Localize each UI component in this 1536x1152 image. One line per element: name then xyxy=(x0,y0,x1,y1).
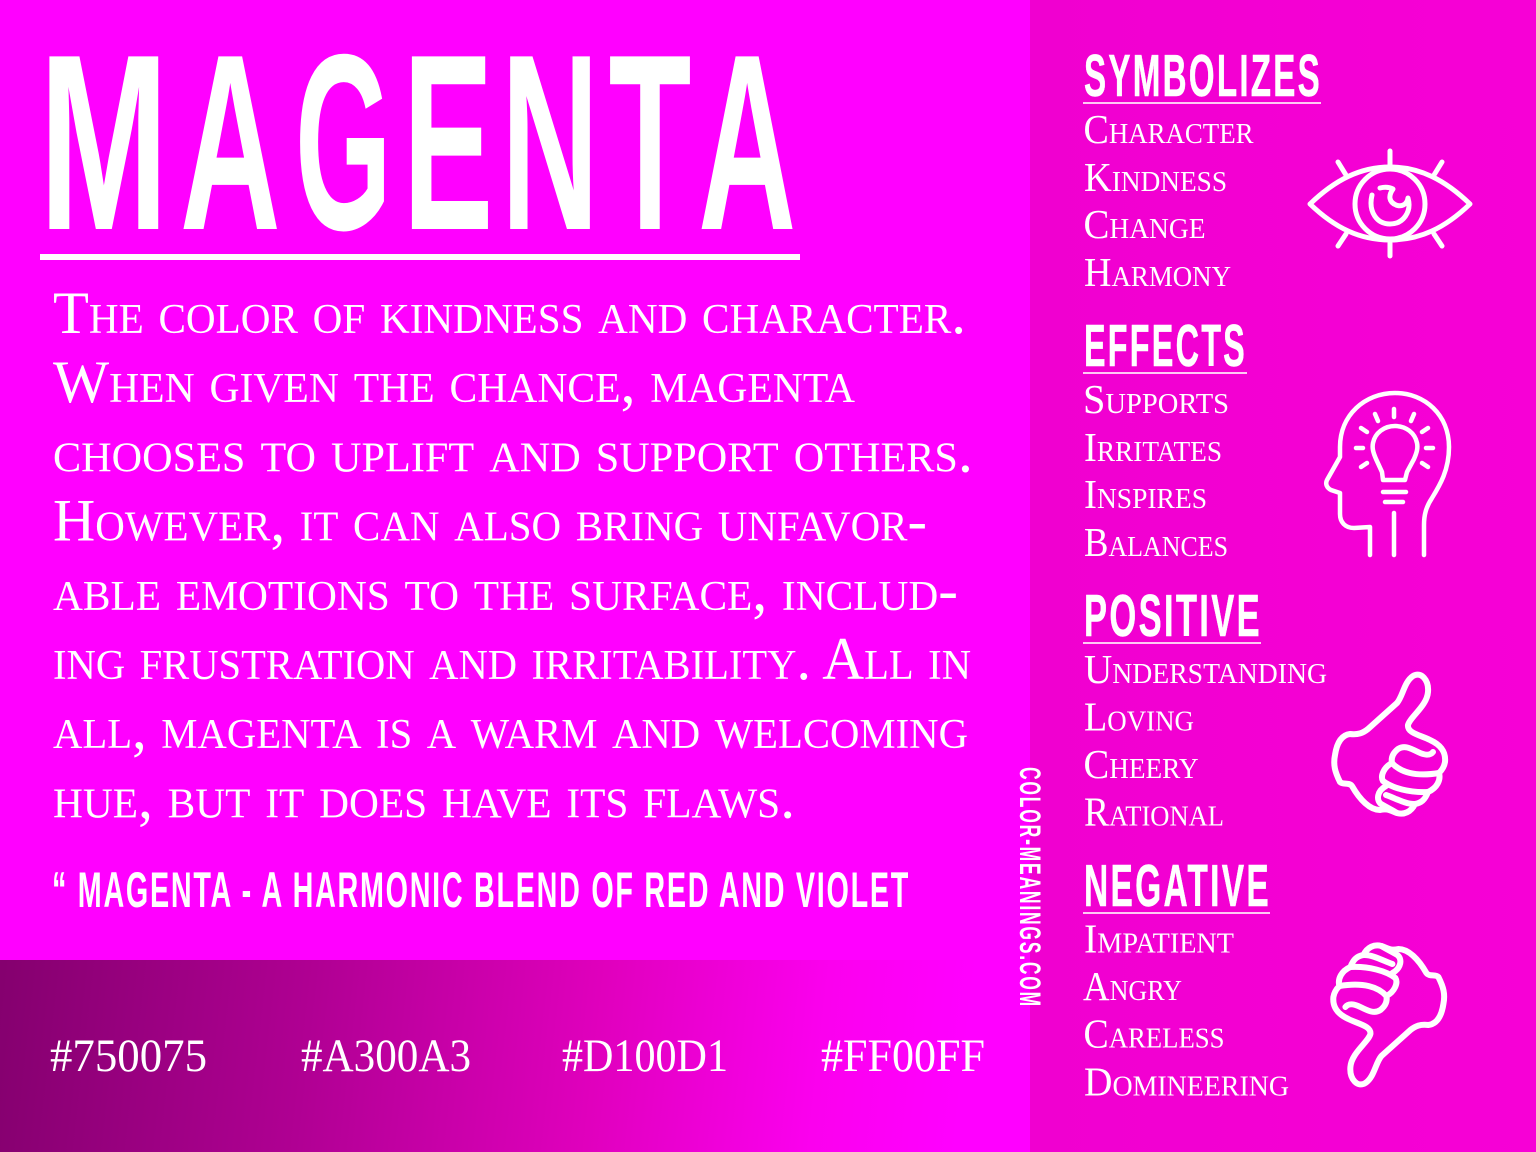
title: A xyxy=(180,3,281,283)
icon: head with light bulb xyxy=(1326,393,1449,555)
background: main magenta field xyxy=(0,0,1030,1152)
section: symbolizes xyxy=(1083,43,1322,295)
list: negative: Angry xyxy=(1083,963,1182,1009)
description text block xyxy=(53,280,973,830)
title: G xyxy=(295,2,392,282)
icon: eye xyxy=(1310,151,1470,256)
heading: effects: EFFECTS xyxy=(1084,313,1247,379)
list: negative: Domineering xyxy=(1084,1058,1289,1104)
title underline xyxy=(40,254,800,260)
list: positive: Loving xyxy=(1084,694,1194,740)
heading: positive: POSITIVE xyxy=(1084,583,1262,649)
section: negative xyxy=(1083,853,1289,1104)
title xyxy=(39,1,796,283)
section: positive xyxy=(1083,583,1327,834)
title: M xyxy=(39,3,169,283)
list: effects: Balances xyxy=(1084,519,1228,565)
list: positive: Understanding xyxy=(1084,646,1327,692)
icon: thumbs up xyxy=(1334,675,1445,814)
description text block: able emotions to the surface, includ- xyxy=(53,557,958,623)
list: effects xyxy=(1083,376,1229,565)
list: symbolizes: Harmony xyxy=(1084,249,1231,295)
hex code 1: #750075 xyxy=(50,1030,207,1082)
list: symbolizes: Change xyxy=(1084,201,1206,247)
list: positive: Rational xyxy=(1084,788,1224,834)
list: effects: Irritates xyxy=(1084,424,1222,470)
title: ENTA xyxy=(403,1,796,283)
list: effects: Inspires xyxy=(1084,471,1207,517)
hex code 3: #D100D1 xyxy=(562,1030,728,1082)
list: positive: Cheery xyxy=(1084,741,1199,787)
list: negative xyxy=(1083,916,1289,1104)
description text block: ing frustration and irritability. All in xyxy=(53,626,971,692)
description text block: chooses to uplift and support others. xyxy=(53,418,973,484)
list: symbolizes: Character xyxy=(1084,106,1254,152)
panel: gradient colour strip xyxy=(0,960,1030,1152)
list: symbolizes xyxy=(1084,106,1254,295)
list: negative: Impatient xyxy=(1084,916,1234,962)
section: effects xyxy=(1083,313,1247,565)
icon: thumbs down xyxy=(1333,945,1444,1084)
description text block: hue, but it does have its flaws. xyxy=(53,764,795,830)
description text block: However, it can also bring unfavor- xyxy=(53,488,927,554)
description text block: When given the chance, magenta xyxy=(53,349,856,415)
list: positive xyxy=(1084,646,1327,834)
heading: negative: NEGATIVE xyxy=(1084,853,1271,919)
list: symbolizes: Kindness xyxy=(1084,154,1227,200)
panel: right sidebar xyxy=(1030,0,1536,1152)
colour hex codes xyxy=(50,1030,985,1082)
hex code 4: #FF00FF xyxy=(821,1030,985,1082)
list: effects: Supports xyxy=(1083,376,1229,422)
description text block: The color of kindness and character. xyxy=(53,280,966,346)
heading: symbolizes: SYMBOLIZES xyxy=(1084,43,1322,109)
quote: “ MAGENTA - A HARMONIC BLEND OF RED AND VIOLET xyxy=(52,862,910,918)
list: negative: Careless xyxy=(1084,1010,1224,1056)
description text block: all, magenta is a warm and welcoming xyxy=(53,695,968,761)
hex code 2: #A300A3 xyxy=(301,1030,471,1082)
